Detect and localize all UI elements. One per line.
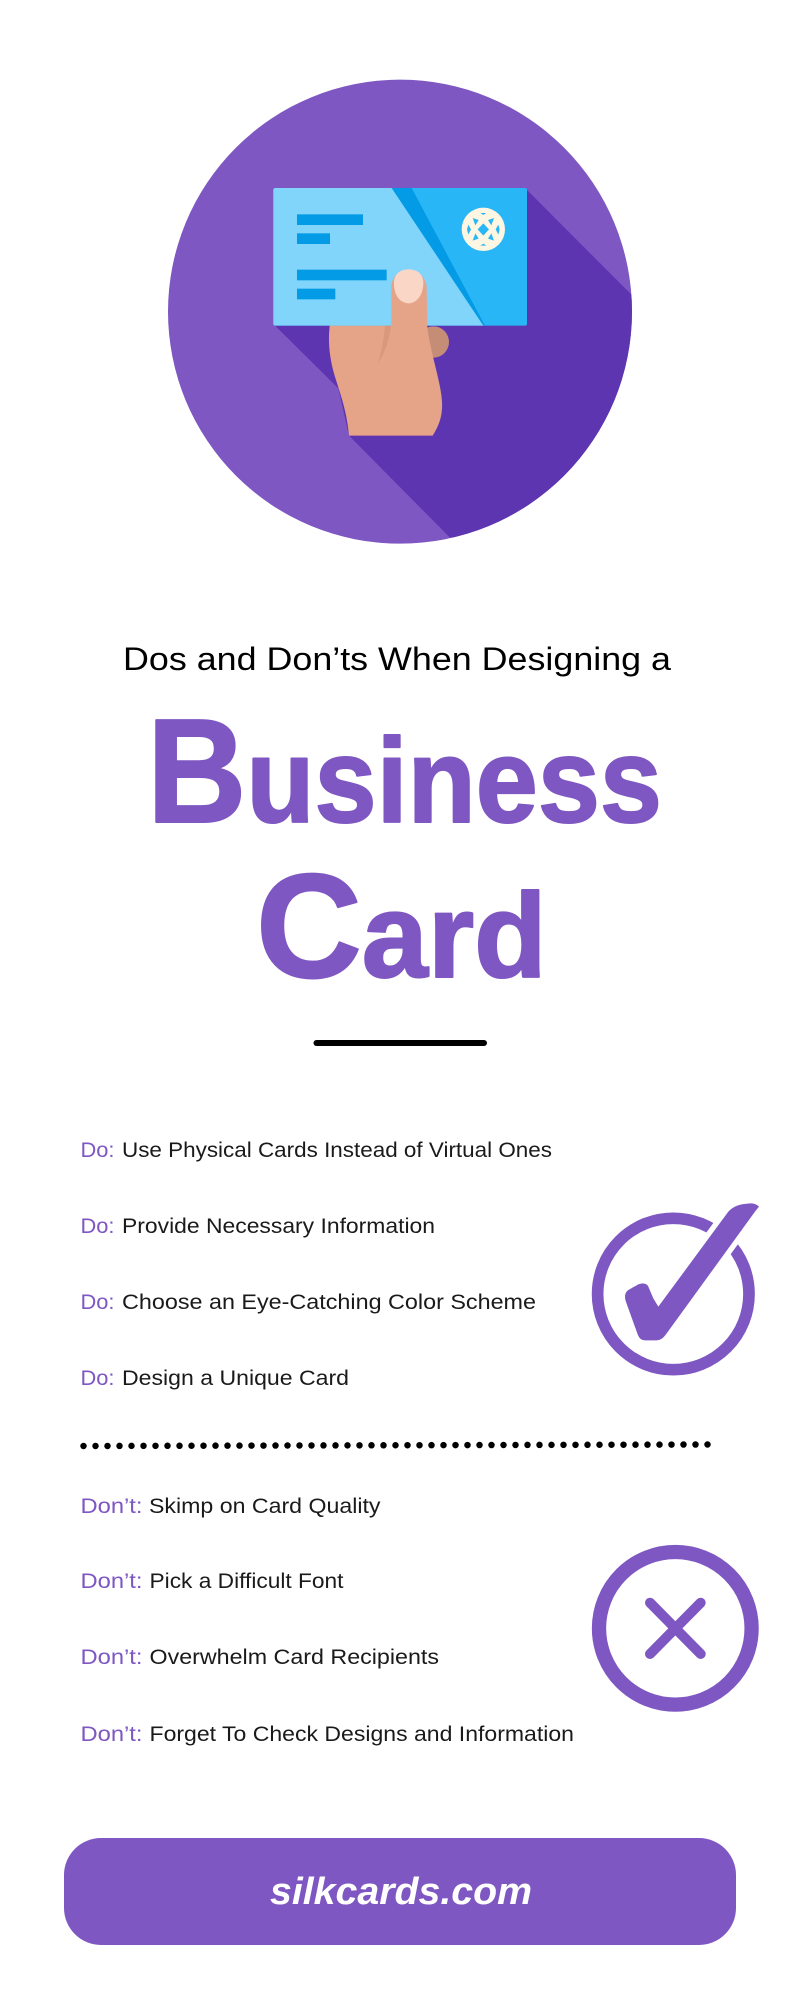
thumbnail <box>394 269 423 303</box>
card stripe <box>392 188 485 326</box>
don't item 2 <box>80 1570 344 1593</box>
don't item 4: Don’t: <box>80 1723 142 1746</box>
icon: check mark in circle <box>598 1203 759 1370</box>
card right panel <box>273 188 527 326</box>
hand back finger <box>418 326 449 358</box>
website text: silkcards.com <box>270 1871 532 1913</box>
do item 2: Provide Necessary Information <box>122 1215 435 1238</box>
card text line 1 <box>297 214 363 225</box>
don't item 1 <box>80 1495 381 1518</box>
don't item 1: Skimp on Card Quality <box>149 1495 381 1518</box>
website button <box>64 1838 736 1945</box>
hand <box>329 323 442 436</box>
thumb <box>391 270 427 327</box>
subtitle: Dos and Don’ts When Designing a <box>123 641 671 677</box>
do item 1: Do: <box>80 1139 114 1162</box>
list: dos <box>80 1139 552 1390</box>
don't item 3: Overwhelm Card Recipients <box>150 1646 439 1669</box>
dotted divider <box>84 1444 708 1446</box>
icon: X in circle <box>599 1552 752 1705</box>
do item 4: Do: <box>80 1367 114 1390</box>
do item 3: Do: <box>80 1291 114 1314</box>
do item 4: Design a Unique Card <box>122 1367 349 1390</box>
card text line 3 <box>297 270 387 280</box>
don't item 1: Don’t: <box>80 1495 142 1518</box>
do item 1: Use Physical Cards Instead of Virtual Ones <box>122 1139 552 1162</box>
card left panel <box>273 188 484 326</box>
thumb crease <box>378 326 391 363</box>
title: Card: Card <box>256 844 547 1009</box>
card globe logo <box>462 208 505 251</box>
list: don'ts <box>80 1495 574 1746</box>
don't item 2: Don’t: <box>80 1570 142 1593</box>
title: Business: Business <box>147 689 662 854</box>
do item 2: Do: <box>80 1215 114 1238</box>
card text line 2 <box>297 233 330 244</box>
illustration: hand holding business card in circle <box>168 80 632 544</box>
do item 3: Choose an Eye-Catching Color Scheme <box>122 1291 536 1314</box>
title underline <box>314 1040 487 1046</box>
don't item 3: Don’t: <box>80 1646 142 1669</box>
purple circle background <box>168 80 632 544</box>
business card <box>273 188 527 326</box>
long shadow <box>275 190 632 538</box>
don't item 2: Pick a Difficult Font <box>150 1570 344 1593</box>
don't item 4: Forget To Check Designs and Information <box>150 1723 574 1746</box>
card text line 4 <box>297 289 335 299</box>
